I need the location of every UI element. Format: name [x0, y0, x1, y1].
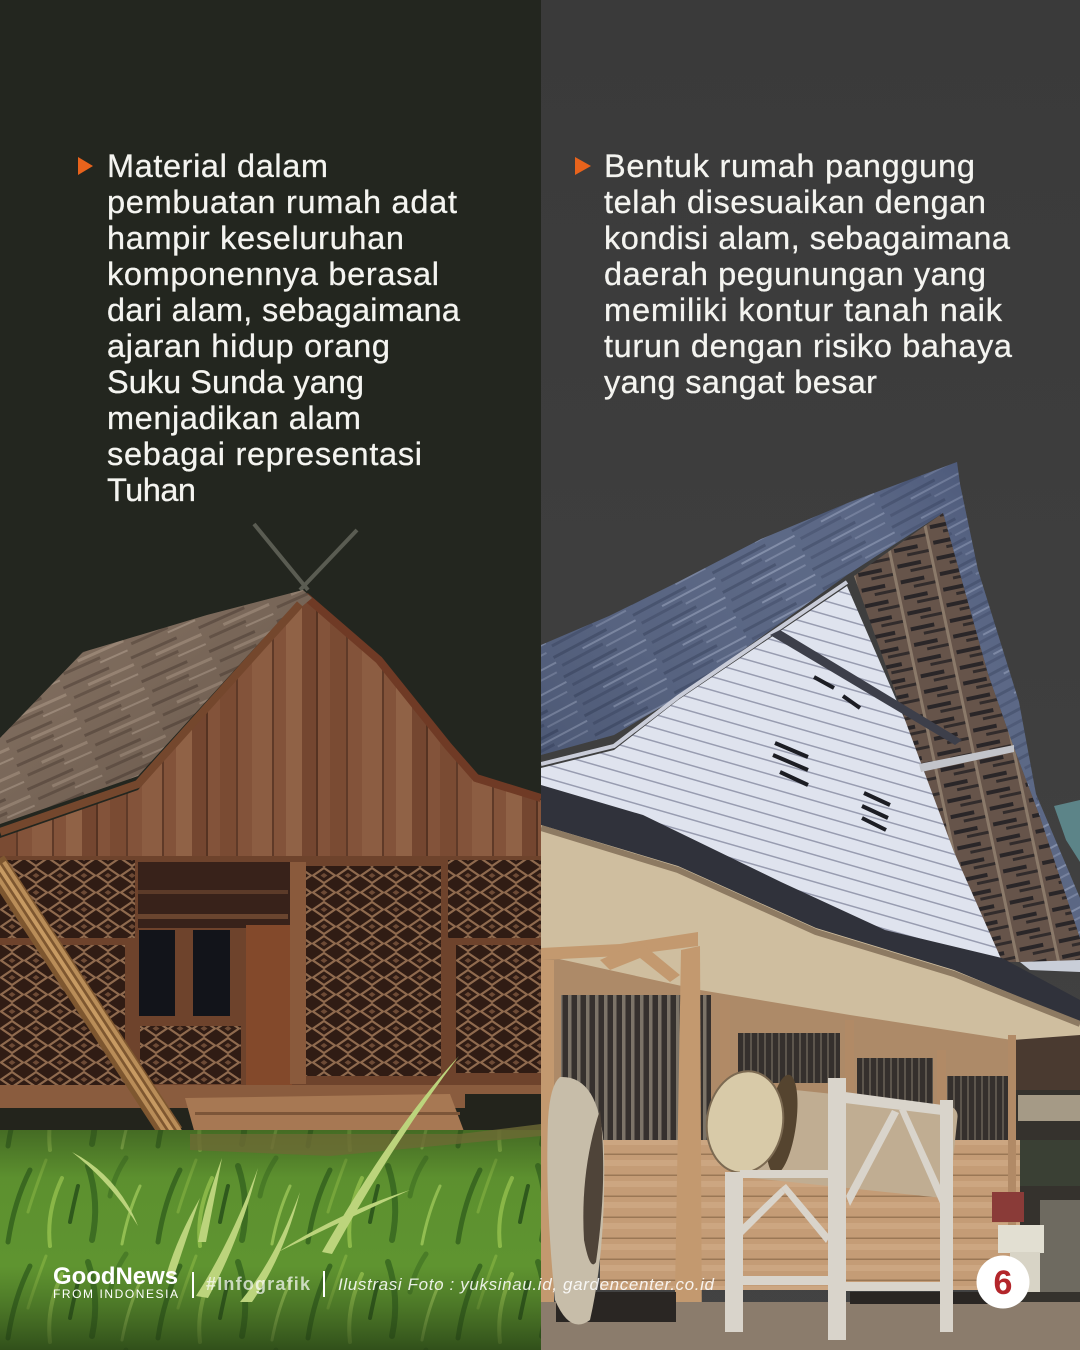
paragraph: materials: ajaran hidup orang [107, 328, 390, 364]
white roof-edge highlight [541, 582, 847, 764]
brown band shadow [541, 828, 1080, 1024]
paragraph: materials: hampir keseluruhan [107, 220, 404, 256]
woven bamboo wall panels [0, 860, 541, 1085]
footer credits [53, 1263, 715, 1301]
paragraph: stilt form: kondisi alam, sebagaimana [604, 220, 1011, 256]
paragraph: stilt form: turun dengan risiko bahaya [604, 328, 1013, 364]
paragraph: stilt form: Bentuk rumah panggung [604, 148, 975, 184]
divider [192, 1272, 194, 1298]
grass field [0, 1130, 541, 1350]
white siding gable wall [541, 586, 1002, 961]
paragraph: stilt form: yang sangat besar [604, 364, 877, 400]
dark crawl space [0, 1094, 541, 1109]
blue grey thatch roof [541, 462, 1080, 945]
plank lower wall [600, 1140, 1020, 1290]
light rafter [919, 745, 1014, 772]
paragraph: materials: pembuatan rumah adat [107, 184, 457, 220]
roof edge trim right [305, 596, 541, 798]
wall post and frames [1008, 1035, 1016, 1225]
crossed roof finials [254, 524, 357, 590]
paragraph: stilt form: daerah pegunungan yang [604, 256, 986, 292]
grass blades [72, 1056, 459, 1302]
page number badge: 6 [994, 1264, 1012, 1302]
roof underside lattice [854, 513, 1080, 962]
bullet text: left column [78, 148, 469, 508]
icon: orange triangle bullet right [575, 157, 591, 175]
dark under-house shadow [556, 1292, 1000, 1322]
wooden gable wall [0, 600, 541, 858]
right interior background [1016, 1035, 1080, 1302]
windows [139, 930, 230, 1016]
dark porch upper [138, 862, 303, 928]
logo: GoodNews from Indonesia: GoodNews [53, 1263, 178, 1290]
white roof beam [1020, 960, 1080, 972]
bullet text: right column [575, 148, 1022, 400]
wooden gate frame [541, 932, 702, 1302]
roof eave trim left [0, 604, 300, 832]
paragraph: materials: menjadikan alam [107, 400, 361, 436]
paragraph: materials: Material dalam [107, 148, 328, 184]
hashtag: #Infografik [206, 1274, 311, 1294]
entrance steps [185, 1094, 464, 1130]
paragraph: materials: Tuhan [107, 472, 196, 508]
thatched roof [0, 590, 312, 824]
dark thatch eave band [541, 785, 1080, 1022]
window lattice panels [561, 995, 1008, 1140]
photo: traditional Sundanese wooden house [0, 524, 541, 1350]
dirt strip [190, 1124, 541, 1156]
house floor beam [0, 1085, 541, 1109]
door [246, 925, 292, 1085]
page number badge [976, 1256, 1030, 1308]
paragraph: stilt form: memiliki kontur tanah naik [604, 292, 1003, 328]
panel: left dark background [0, 0, 541, 1350]
bamboo ladder [0, 862, 182, 1134]
storage boxes [992, 1192, 1044, 1292]
paragraph: materials: sebagai representasi [107, 436, 422, 472]
wall base behind windows [542, 959, 1008, 1104]
panel: right grey background [541, 0, 1080, 1350]
hanging wooden slit drum [547, 1077, 604, 1324]
paragraph: materials: Suku Sunda yang [107, 364, 364, 400]
paragraph: stilt form: telah disesuaikan dengan [604, 184, 986, 220]
porch post [290, 862, 306, 1084]
vents [773, 677, 890, 830]
small distant roof [1054, 800, 1080, 862]
paragraph: materials: dari alam, sebagaimana [107, 292, 461, 328]
large drum [700, 1066, 959, 1199]
paragraph: materials: komponennya berasal [107, 256, 439, 292]
lower house body [0, 856, 541, 1096]
bottom ground [541, 1302, 1080, 1350]
icon: orange triangle bullet [78, 157, 93, 175]
divider two [323, 1271, 325, 1297]
drum stand [725, 1078, 953, 1340]
photo: stilt house with steep roof [541, 462, 1080, 1350]
diagonal strut [770, 630, 962, 745]
tan eave fascia [541, 815, 1080, 1040]
logo: GoodNews from Indonesia: FROM INDONESIA [53, 1287, 178, 1301]
photo credit: Ilustrasi Foto : yuksinau.id, gardencenter.co.id [338, 1275, 715, 1294]
